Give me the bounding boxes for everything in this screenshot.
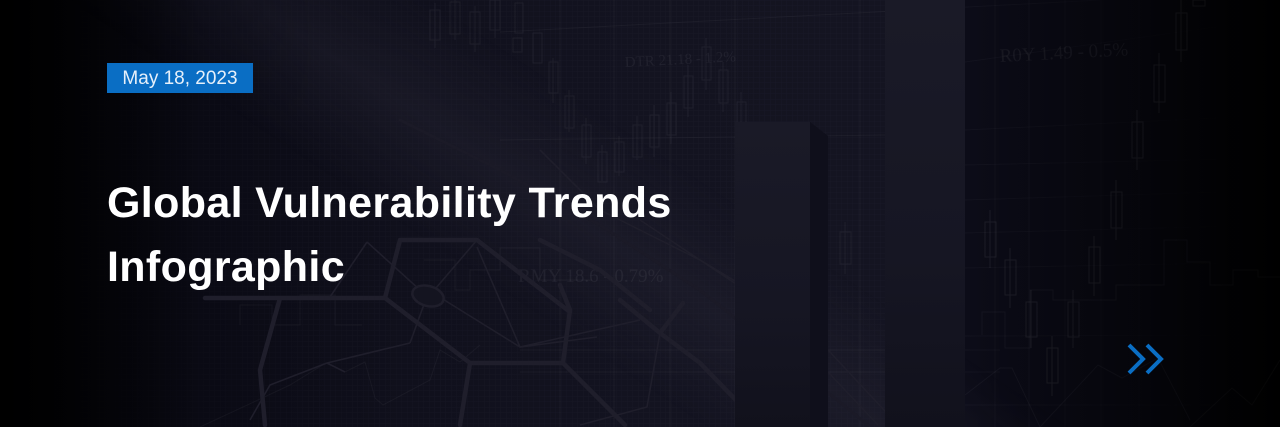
title: Global Vulnerability Trends	[107, 179, 672, 227]
icon: double chevron arrow	[1128, 344, 1164, 374]
coarse grid	[500, 0, 1066, 427]
tall bar	[885, 0, 965, 427]
fine grid	[0, 0, 885, 427]
market ticker labels: RMY 18.6 - 0.79%	[518, 266, 664, 287]
title	[107, 179, 672, 291]
date badge	[107, 63, 253, 93]
globe node	[410, 282, 446, 310]
edge fades	[965, 0, 1280, 427]
glow band of globe	[241, 0, 732, 324]
date badge: May 18, 2023	[122, 68, 238, 89]
short bar	[735, 122, 810, 427]
step line traces	[200, 240, 1280, 427]
title: Infographic	[107, 243, 345, 291]
market ticker labels: DTR 21.18 - 1.2%	[624, 49, 736, 71]
market ticker labels: R0Y 1.49 - 0.5%	[999, 39, 1129, 67]
globe network lines	[205, 120, 868, 425]
market ticker labels	[518, 39, 1129, 287]
candlesticks	[430, 0, 1205, 396]
